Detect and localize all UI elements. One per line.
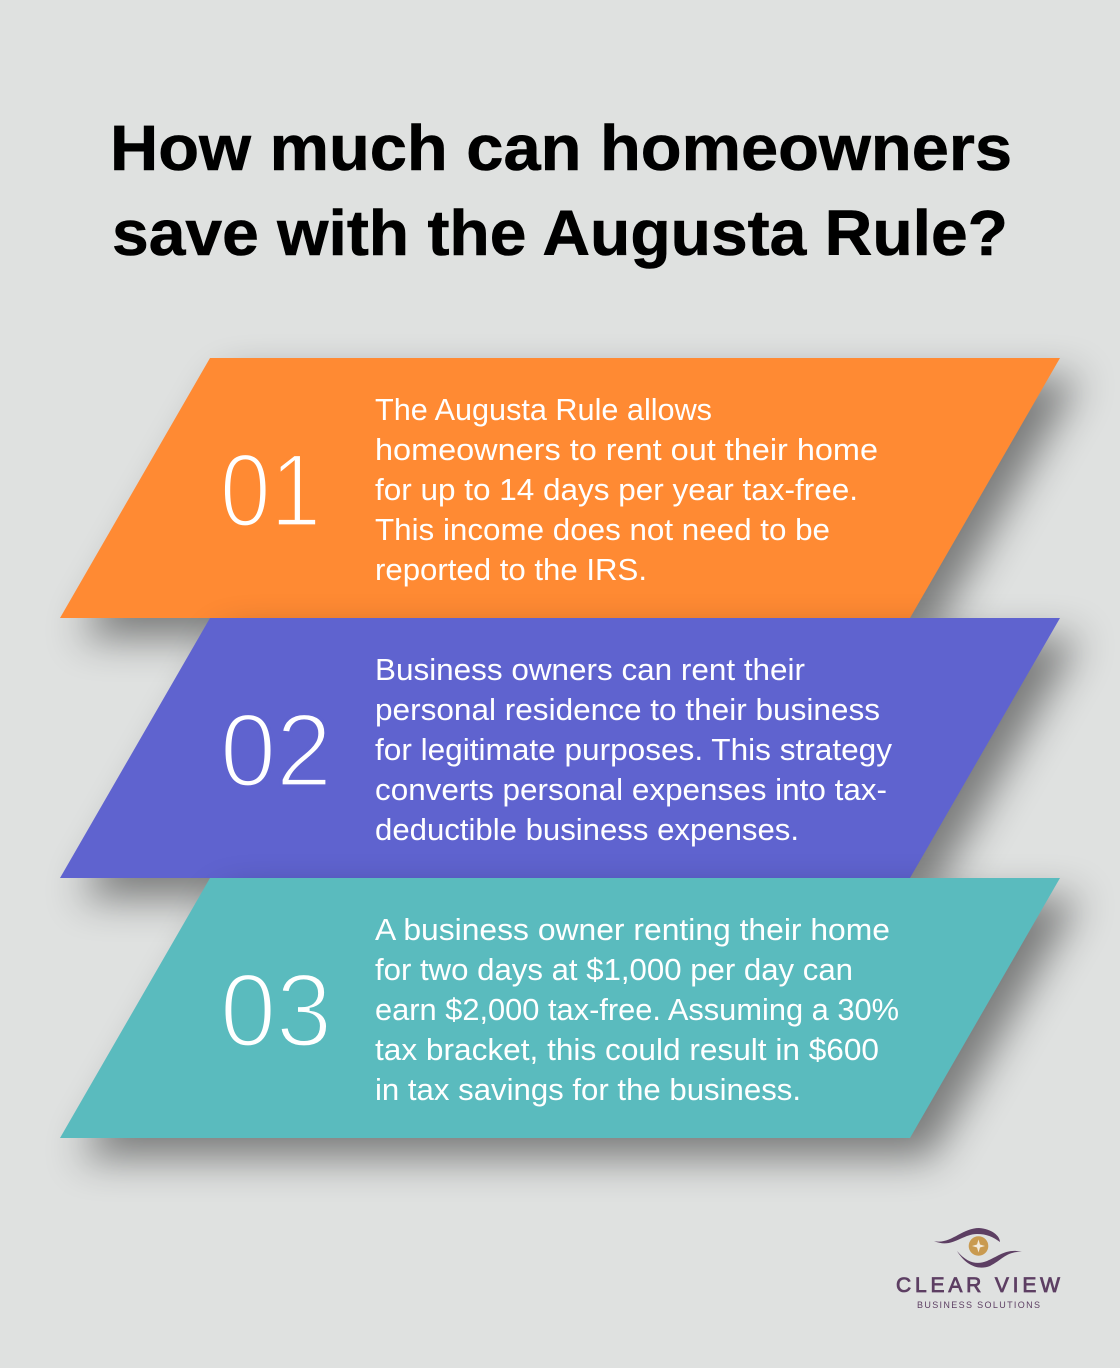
step 01 text <box>375 392 878 587</box>
step 01 text: This income does not need to be <box>375 512 830 547</box>
step 03 text: in tax savings for the business. <box>375 1072 801 1107</box>
title: How much can homeowners <box>110 112 1012 184</box>
panel: step 03 <box>60 878 1060 1138</box>
step number 02: 02 <box>220 693 332 809</box>
step 02 text: Business owners can rent their <box>375 652 805 687</box>
panel: step 01 <box>60 358 1060 618</box>
logo wordmark: CLEAR VIEW <box>896 1274 1060 1297</box>
step 01 text: homeowners to rent out their home <box>375 432 878 467</box>
step 03 text: tax bracket, this could result in $600 <box>375 1032 879 1067</box>
title: save with the Augusta Rule? <box>112 197 1008 269</box>
step 03 text: earn $2,000 tax-free. Assuming a 30% <box>375 992 899 1027</box>
step 01 text: reported to the IRS. <box>375 552 647 587</box>
step 01 text: for up to 14 days per year tax-free. <box>375 472 858 507</box>
logo tagline: BUSINESS SOLUTIONS <box>917 1300 1040 1310</box>
step 03 text: for two days at $1,000 per day can <box>375 952 853 987</box>
step 03 text <box>375 912 899 1107</box>
icon: eye <box>934 1228 1022 1268</box>
step 02 text: for legitimate purposes. This strategy <box>375 732 893 767</box>
step 02 text: converts personal expenses into tax- <box>375 772 887 807</box>
title <box>110 112 1012 269</box>
step 01 text: The Augusta Rule allows <box>375 392 712 427</box>
step number 01: 01 <box>220 433 321 549</box>
step 03 text: A business owner renting their home <box>375 912 890 947</box>
step 02 text: deductible business expenses. <box>375 812 799 847</box>
panel: step 02 <box>60 618 1060 878</box>
step 02 text: personal residence to their business <box>375 692 880 727</box>
step number 03: 03 <box>220 953 332 1069</box>
logo: Clear View Business Solutions <box>896 1228 1060 1310</box>
step 02 text <box>375 652 893 847</box>
